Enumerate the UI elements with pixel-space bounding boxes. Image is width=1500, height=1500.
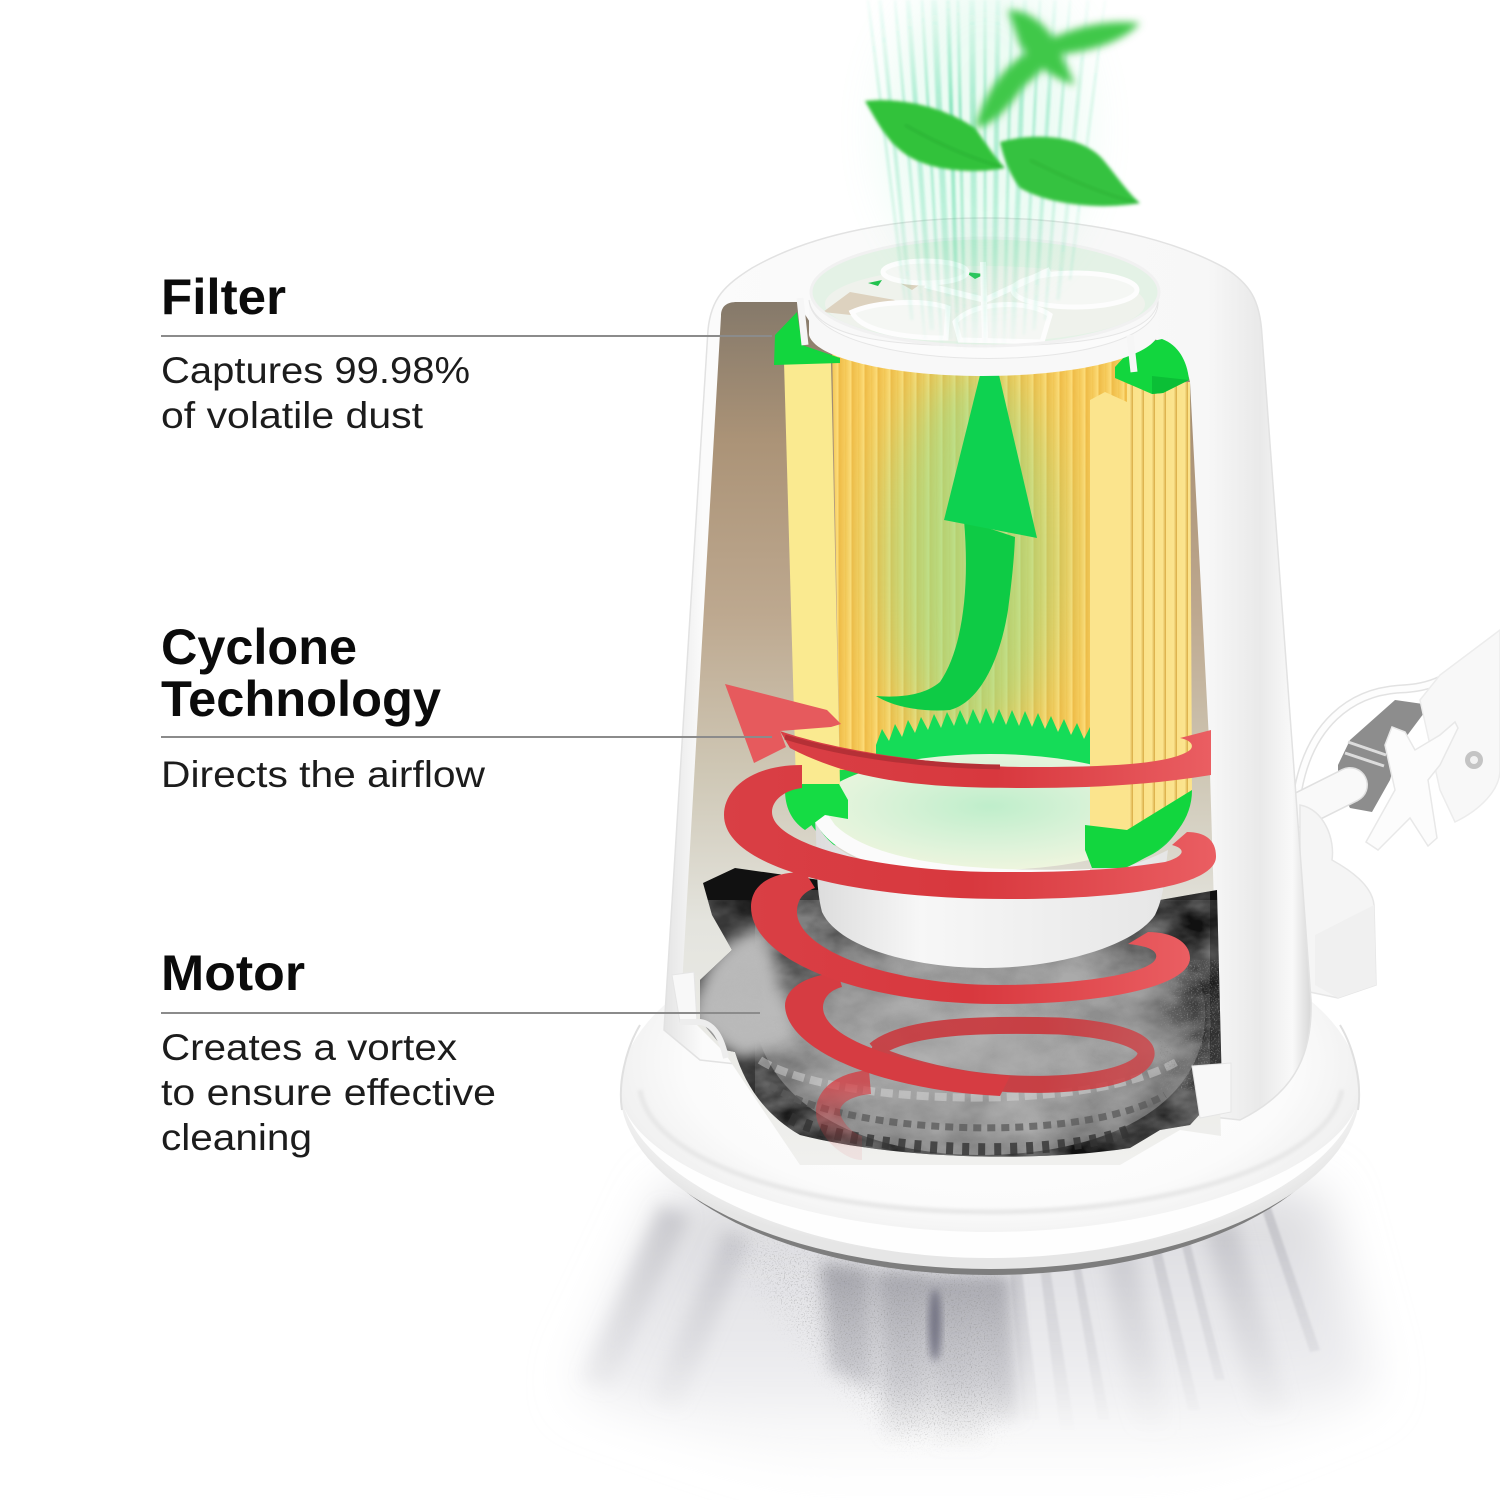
text: filter description line 2: of volatile dust (161, 395, 424, 436)
green air rays and mist (868, 0, 1105, 350)
metal swivel (1338, 700, 1430, 812)
text: motor description line 3: cleaning (161, 1117, 312, 1158)
hose (1298, 650, 1480, 790)
fourth spiral section (785, 973, 1010, 1096)
joint ball and box (1300, 805, 1376, 998)
heading: motor: Motor (161, 945, 305, 1001)
grille spokes and lobes (852, 261, 1137, 342)
upper right green bracket (1115, 339, 1189, 394)
spiral arrow head (725, 684, 841, 763)
connector tube (1300, 785, 1350, 810)
lower right green bracket (1085, 790, 1192, 868)
callout: filter (161, 269, 772, 436)
dark dust streak (929, 1289, 941, 1361)
base disc (620, 911, 1360, 1269)
grey underside rim of the base (630, 917, 1350, 1275)
exhaust of dust below the base (575, 1190, 1375, 1480)
grille rim (809, 300, 1158, 376)
callout: motor (161, 945, 760, 1158)
screw (1465, 751, 1483, 769)
bracket disc (1420, 630, 1500, 822)
leader line: filter (161, 335, 772, 337)
lower left green bracket (785, 770, 848, 830)
lower support collar (790, 770, 1192, 860)
heading: filter: Filter (161, 269, 286, 325)
motor (690, 860, 1230, 1170)
right pleats (1127, 382, 1192, 830)
heading: technology: Technology (161, 671, 441, 727)
white bowl (815, 820, 1168, 968)
green toothed gear at filter base (876, 708, 1094, 800)
heading: cyclone: Cyclone (161, 619, 357, 675)
third spiral section (751, 872, 1190, 1004)
leaf: blurred upper (975, 10, 1140, 128)
white dust spray (1160, 960, 1220, 1090)
darker inner edge of the top band (785, 737, 1000, 767)
white clips at cavity bottom (672, 972, 1231, 1118)
text: motor description line 1: Creates a vortex (161, 1027, 458, 1068)
upper left green bracket (774, 312, 840, 365)
leaf: right (1000, 137, 1140, 206)
tan and green gaps (823, 270, 1098, 316)
inner cup of the filter (814, 754, 1166, 870)
top spiral band (780, 730, 1211, 788)
rim front surface (809, 300, 1158, 358)
green leaves (865, 10, 1140, 206)
cross knob (1366, 722, 1458, 850)
green airflow arrow (876, 375, 1037, 710)
body shell (664, 218, 1311, 1120)
leader line: cyclone (161, 736, 772, 738)
red cyclone spiral (724, 684, 1216, 1148)
dust grain (734, 1236, 1010, 1449)
filter cartridge (774, 312, 1192, 968)
green glow within filter (885, 370, 1055, 750)
text: filter description line 1: Captures 99.98% (161, 350, 470, 391)
leaf: left (865, 100, 1005, 171)
text: motor description line 2: to ensure effective (161, 1072, 496, 1113)
text: cyclone description: Directs the airflow (161, 754, 485, 795)
leader line: motor (161, 1012, 760, 1014)
icon: hose and joint at right (1298, 630, 1500, 998)
cavity: interior of the shell (680, 302, 1221, 1165)
grey housing ring at left (690, 925, 800, 1060)
callout: cyclone technology (161, 619, 772, 795)
second spiral section (724, 765, 1216, 899)
fading spiral tail (828, 1082, 870, 1148)
pleated filter centre (832, 345, 1130, 780)
left pale filter strip (784, 362, 840, 785)
lowest spiral loop (870, 1025, 1146, 1084)
top grille of the filter (800, 238, 1159, 376)
